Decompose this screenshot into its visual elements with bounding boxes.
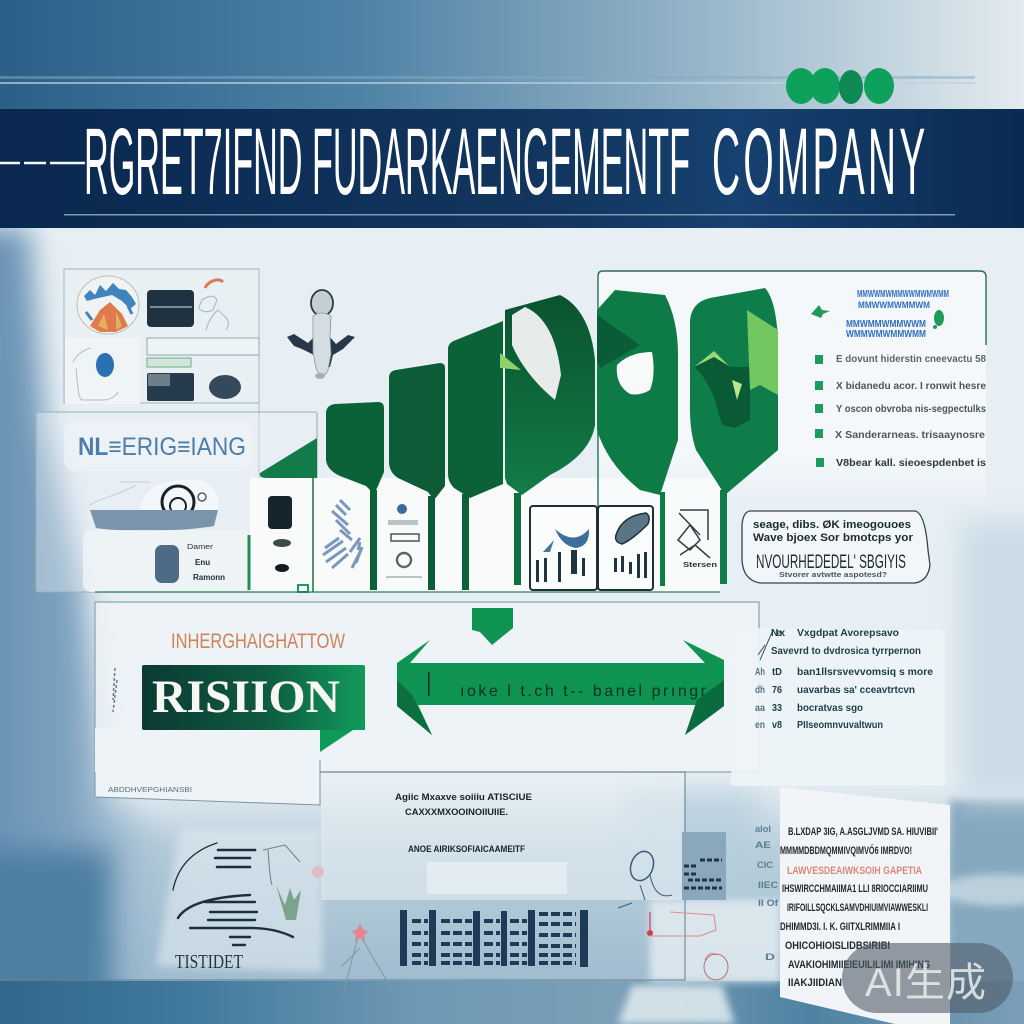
panel: paper note: AVAKIOHIMIIEIEUILILIMI IMIHINS bbox=[788, 959, 930, 971]
panel: right table: Nex bbox=[771, 628, 785, 639]
house-shaped arrow bbox=[260, 438, 317, 478]
paddle 6 bbox=[690, 288, 778, 584]
panel: right table: ban1llsrsvevvomsiq s more bbox=[797, 667, 933, 678]
panel: lower note bbox=[83, 530, 251, 592]
panel: right table bbox=[731, 628, 945, 786]
icon: bar chart card 1 bbox=[530, 506, 597, 590]
panel: right table: Vxgdpat Avorepsavo bbox=[797, 628, 899, 639]
panel: paper note: IIAKJIIDIAN bbox=[788, 977, 842, 989]
panel: paper note: MMMMDBDMQMMIVQIMVÓ6 IMRDVO! bbox=[780, 844, 912, 857]
text block: CAXXXMXOOINOIIUIIE. bbox=[405, 807, 508, 817]
panel: right table: bocratvas sgo bbox=[797, 703, 863, 714]
blue heading: MMWMMWMMWWM bbox=[846, 319, 926, 330]
blue heading bbox=[846, 289, 949, 340]
left dash line bbox=[0, 162, 85, 164]
caption: TISTIDET bbox=[175, 951, 243, 973]
icon: red star triangle bbox=[342, 924, 395, 995]
green label box bbox=[142, 665, 365, 752]
bullet items bbox=[815, 355, 824, 467]
blue heading: WMMWMWMMWMM bbox=[846, 329, 926, 340]
icon: striped leaf bbox=[323, 500, 362, 568]
panel: paper note: LAWVESDEAIWKSOIH GAPETIA bbox=[787, 865, 922, 877]
panel: right table: 33 bbox=[772, 703, 782, 714]
panel: paper note: DHIMMD3I. I. K. GIITXLRIMMIIA I bbox=[780, 921, 900, 933]
green dots bbox=[786, 68, 894, 104]
paddle 1 bbox=[326, 402, 384, 590]
bullet text: E dovunt hiderstin cneevactu 58 bbox=[836, 354, 986, 365]
icon: process sketch bbox=[618, 832, 728, 980]
icon: dark oval bbox=[209, 375, 241, 399]
paddle 4 bbox=[500, 295, 595, 585]
panel: right table: PIIseomnvuvaltwun bbox=[797, 720, 883, 731]
icon: colourful mosaic bbox=[77, 276, 139, 334]
badge: AI generated: AI生成 bbox=[865, 961, 986, 1005]
text block: ANOE AIRIKSOFIAICAAMEITF bbox=[408, 844, 525, 854]
callout: rounded note: NVOURHEDEDEL' SBGIYIS bbox=[756, 552, 906, 573]
green label box: RISIION bbox=[152, 671, 340, 723]
baseline of chart bbox=[95, 591, 720, 593]
bullet text: V8bear kall. sieoespdenbet is bbox=[836, 458, 986, 469]
panel: lower note: Damer bbox=[187, 544, 214, 551]
icon: line sketch with plant bbox=[156, 830, 324, 973]
icon: elephant figure bbox=[287, 290, 355, 379]
paddle 5 bbox=[597, 290, 678, 586]
left table fragments: II Of bbox=[758, 898, 779, 908]
bullet text: X Sanderarneas. trisaaynosre bbox=[835, 430, 985, 441]
panel: NL section bbox=[36, 412, 317, 592]
panel: paper note: B.LXDAP 3IG, A.ASGLJVMD SA. HIUVIBII' bbox=[788, 826, 938, 838]
left table fragments bbox=[755, 824, 779, 962]
bullet text: Y oscon obvroba nis-segpectulks bbox=[836, 404, 986, 415]
panel: top-left icons bbox=[64, 269, 259, 590]
left table fragments: CIC bbox=[757, 860, 774, 870]
callout: rounded note bbox=[742, 511, 930, 583]
title: COMPANY bbox=[712, 109, 925, 215]
icon: dark split device bbox=[147, 373, 194, 401]
chart: green paddles bbox=[260, 288, 778, 590]
chart: barcode table bbox=[400, 910, 588, 967]
panel: lower note: Enu bbox=[195, 558, 210, 567]
panel: right table: Savevrd to dvdrosica tyrrpernon bbox=[771, 646, 921, 657]
icon: sketch figure bbox=[678, 510, 717, 569]
panel: right table: dh bbox=[755, 685, 765, 696]
bullet text bbox=[835, 354, 986, 469]
arrow: double headed bbox=[397, 640, 724, 735]
panel: Rision bbox=[95, 602, 759, 805]
green bar bbox=[147, 358, 191, 367]
panel: lower note: Ramonn bbox=[193, 573, 225, 582]
caption: ABDDHVEPGHIANSBI bbox=[108, 787, 192, 794]
icon: blue circle sketch bbox=[65, 338, 140, 404]
callout: rounded note: Wave bjoex Sor bmotcps yor bbox=[753, 532, 914, 544]
arrow: down bbox=[472, 608, 513, 645]
icon: stacked small glyphs bbox=[386, 504, 422, 578]
panel: right table: 76 bbox=[772, 685, 782, 696]
panel: right bullet list bbox=[598, 271, 986, 590]
icon: swirl sketch bbox=[199, 280, 228, 330]
panel: paper note: IRIFOILLSQCKLSAMVDHIUIMVIAWWESKLI bbox=[787, 902, 928, 914]
icon: dark rounded device bbox=[147, 290, 194, 327]
icon: swirl tray bbox=[90, 480, 218, 531]
faint card bbox=[427, 862, 567, 894]
NL heading: NL≡ERIG≡IANG bbox=[78, 433, 246, 461]
blue heading: MMWWMWMMWM bbox=[858, 300, 930, 310]
callout: rounded note: Stvorer avtwtte aspotesd? bbox=[779, 572, 887, 579]
blue heading: MMWWMWMMWWMWMWMM bbox=[857, 289, 949, 300]
panel: paper note: IHSWIRCCHMAIIMA1 LLI 8RIOCCIARIIMU bbox=[782, 883, 928, 895]
bullet text: X bidanedu acor. I ronwit hesre bbox=[836, 381, 986, 392]
panel: rision lower box bbox=[95, 728, 320, 805]
panel: white chart base bbox=[250, 478, 720, 592]
left table fragments: IIEC bbox=[758, 880, 779, 890]
panel: right table: en bbox=[755, 720, 765, 731]
panel: right table: Ah bbox=[755, 667, 765, 678]
text block: Agiic Mxaxve soiiiu ATISCIUE bbox=[395, 792, 532, 802]
icon: sketch figure: Stersen bbox=[683, 562, 717, 569]
callout: rounded note: seage, dibs. ØK imeogouoes bbox=[753, 519, 911, 531]
panel: lower centre bbox=[0, 772, 685, 980]
badge: AI generated bbox=[842, 943, 1013, 1013]
icon: green leaf bbox=[811, 305, 944, 329]
text block bbox=[395, 792, 532, 854]
panel: paper note bbox=[755, 787, 950, 1024]
outline bar bbox=[147, 338, 259, 355]
arrow: double headed: ıoke l t.ch t-- banel prıngr bbox=[460, 683, 707, 700]
panel: right table: tD bbox=[772, 667, 782, 678]
paddle 3 bbox=[448, 321, 503, 590]
header band bbox=[0, 109, 1024, 228]
left table fragments: AE bbox=[755, 840, 771, 850]
orange heading: INHERGHAIGHATTOW bbox=[171, 630, 345, 653]
small tick marks bbox=[113, 668, 117, 712]
panel: right table: aa bbox=[755, 703, 765, 714]
left table fragments: D bbox=[765, 952, 776, 962]
panel: right table: uavarbas sa' cceavtrtcvn bbox=[797, 685, 915, 696]
left table fragments: alol bbox=[755, 824, 771, 834]
icon: bar chart card 2 bbox=[598, 506, 653, 590]
panel: paper note: OHICOHIOISLIDBSIRIBI bbox=[785, 940, 890, 952]
panel: right table: v8 bbox=[772, 720, 782, 731]
small icon column 1 bbox=[249, 478, 313, 592]
paddle 2 bbox=[389, 363, 445, 590]
